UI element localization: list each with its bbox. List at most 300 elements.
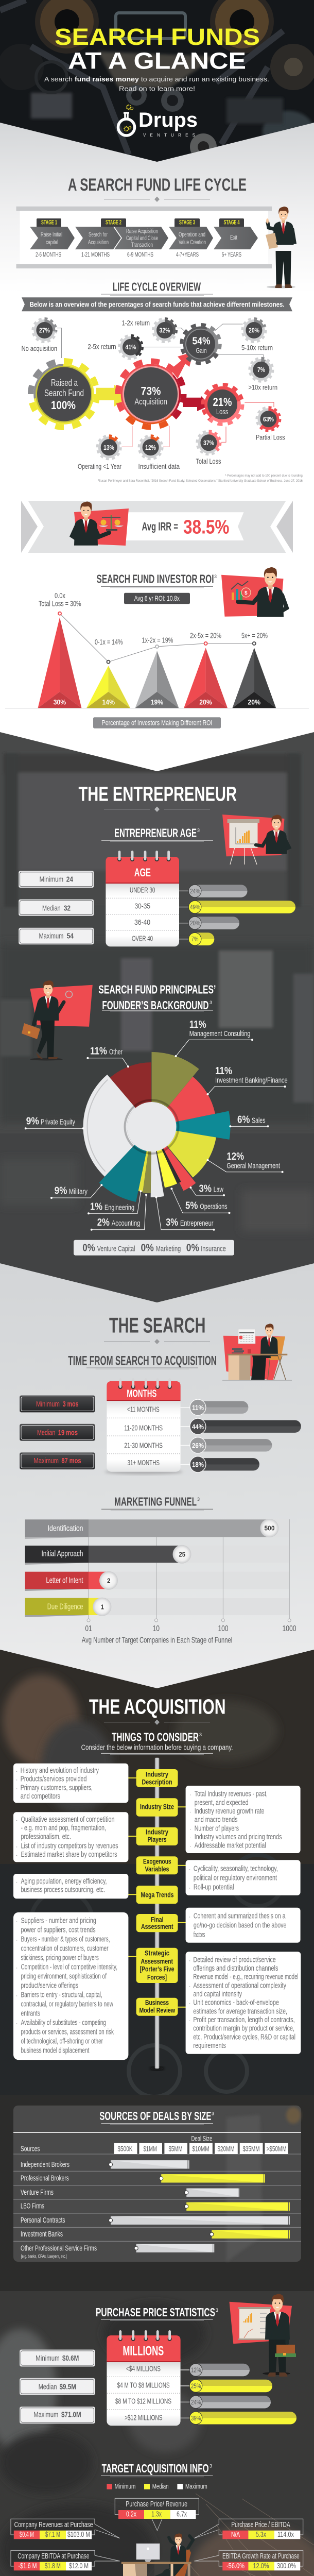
bar: independent brokers <box>109 2160 189 2169</box>
table header: deal sizes <box>114 2143 288 2154</box>
panel: strategic assessment details: · <box>16 2021 18 2026</box>
info box: purchase price / revenue: 0.2x <box>126 2510 136 2518</box>
node: final assessment <box>136 1914 178 1932</box>
panel: industry size details: · <box>189 1809 191 1815</box>
info box: EBITDA growth rate: -56.0% <box>226 2562 245 2570</box>
panel: life cycle stages: 2-6 MONTHS <box>36 252 61 258</box>
table header: deal sizes: >$50MM <box>267 2145 286 2153</box>
stat box: maximum price <box>20 2407 95 2424</box>
pill: chart caption: Percentage of Investors Making Different ROI <box>102 718 212 726</box>
info box: company revenues at purchase <box>11 2519 95 2539</box>
subtitle: A search fund raises money to acquire and run an existing business. <box>44 75 269 83</box>
node: exogenous variables: Exogenous <box>143 1857 171 1865</box>
bar: 39% <box>189 2412 296 2425</box>
gear: >10x return 7%: >10x return <box>248 383 277 392</box>
panel: industry description details: Primary customers, suppliers, <box>21 1784 93 1792</box>
node: business model review: Business <box>145 1999 169 2007</box>
node: final assessment: Final <box>151 1916 164 1924</box>
panel: life cycle stages: Acquisition <box>88 240 109 246</box>
panel: strategic assessment details <box>13 1912 128 2060</box>
callouts: founder background: 5% <box>185 1200 198 1212</box>
bar: initial approach: Initial Approach <box>41 1550 83 1558</box>
panel: industry size details <box>186 1786 301 1853</box>
panel: business model details: Detailed review of product/service <box>193 1956 276 1964</box>
panel: mega trends details: · <box>16 1879 18 1885</box>
calendar: millions <box>107 2330 181 2426</box>
node: industry size: Industry Size <box>140 1803 174 1811</box>
table header: deal sizes: $20MM <box>217 2145 235 2153</box>
bar: 24%: 24% <box>191 2398 201 2406</box>
stat box: minimum 3 mos: Minimum <box>36 1400 60 1409</box>
pyramid: 14% <box>86 666 130 708</box>
heading: search fund investor ROI <box>97 572 217 588</box>
bar: 39%: 39% <box>191 2414 201 2422</box>
panel: sources of deals by size: Sources <box>21 2145 40 2154</box>
panel: strategic assessment details: product/service offerings <box>21 1981 78 1990</box>
node: strategic assessment: [Porter’s Five <box>140 1965 175 1973</box>
gear: 5-10x return 20% <box>240 317 273 351</box>
info box: company EBITDA at purchase: $1.8 M <box>45 2562 61 2570</box>
info box: purchase price / revenue: Purchase Price/ Revenue <box>126 2500 187 2509</box>
node: industry players: Industry <box>146 1828 168 1836</box>
chart: investor ROI pyramids: Total Loss = 30% <box>39 600 81 608</box>
panel: strategic assessment details: · <box>16 1937 18 1943</box>
gear: operating <1 year 13% <box>78 434 123 470</box>
callouts: founder background: 11% <box>189 1019 206 1030</box>
info box: company revenues at purchase: $103.0 M <box>67 2530 90 2539</box>
subheading: entrepreneur age <box>101 826 213 841</box>
bar: 18%: 18% <box>192 1461 204 1469</box>
panel: business model details: requirements <box>193 2042 226 2050</box>
callouts: founder background: Accounting <box>112 1219 140 1228</box>
subheading: target acquisition info: TARGET ACQUISITION INFO <box>102 2462 209 2475</box>
gear: loss: Loss <box>216 408 229 416</box>
subheading: founder's background: FOUNDER’S BACKGROUND <box>102 998 208 1012</box>
panel: life cycle stages: Operation and <box>179 232 205 238</box>
bar: letter of intent <box>25 1571 118 1591</box>
bar: initial approach <box>25 1545 191 1565</box>
figure: man with scale <box>72 501 124 546</box>
pyramid: 30% <box>38 617 81 708</box>
pill: chart caption <box>93 717 221 728</box>
subheading: founder's background: SEARCH FUND PRINCIPALES’ <box>98 982 216 996</box>
gear: raised a search fund: Search Fund <box>44 387 84 398</box>
info box: EBITDA growth rate: 300.0% <box>277 2562 296 2570</box>
panel: industry description details: History and evolution of industry <box>21 1767 99 1775</box>
node: strategic assessment <box>136 1948 178 1983</box>
panel: life cycle stages: STAGE 4 <box>223 219 240 226</box>
subheading: things to consider: THINGS TO CONSIDER <box>112 1730 199 1743</box>
info box: company EBITDA at purchase: -$1.6 M <box>19 2562 37 2570</box>
chart: marketing funnel: Avg Number of Target Companies in Each Stage of Funnel <box>82 1636 232 1645</box>
gear: gain: 54% <box>193 336 211 347</box>
panel: industry players details: · <box>16 1844 18 1850</box>
calendar: age: UNDER 30 <box>130 886 155 894</box>
stat box: minimum 3 mos <box>20 1396 95 1412</box>
panel: final assessment details <box>186 1908 301 1943</box>
bar: identification <box>25 1519 278 1539</box>
gear: total loss 37%: 37% <box>203 439 214 447</box>
panel: life cycle stages: Value Creation <box>179 240 206 246</box>
banner: average IRR: Avg IRR = <box>142 520 178 533</box>
panel: life cycle stages: Search for <box>89 232 108 238</box>
gear: loss: 21% <box>213 395 232 409</box>
chart: investor ROI pyramids: 0.0x <box>55 592 66 600</box>
figure: presenter with chart <box>222 815 289 865</box>
calendar: months: <11 MONTHS <box>127 1405 160 1414</box>
heading: sources of deals by size <box>99 2109 214 2125</box>
panel: exogenous variables details: · <box>189 1886 190 1891</box>
panel: life cycle stages: Exit <box>230 235 238 241</box>
figure: man with board and money case <box>230 2294 296 2377</box>
subheading: things to consider <box>81 1730 233 1755</box>
gear: insufficient data 12%: 12% <box>145 444 156 451</box>
panel: exogenous variables details <box>186 1860 301 1895</box>
panel: strategic assessment details: products or services, assessment on risk <box>21 2027 114 2036</box>
panel: exogenous variables details: political or regulatory environment <box>194 1873 277 1882</box>
info box: EBITDA growth rate <box>219 2550 303 2570</box>
info box: purchase price / EBITDA <box>219 2519 303 2539</box>
stat box: minimum 3 mos: 3 mos <box>63 1400 78 1409</box>
panel: strategic assessment details: contractual, or regulatory barriers to new <box>21 1999 113 2008</box>
node: exogenous variables: Variables <box>145 1865 169 1873</box>
node: strategic assessment: Strategic <box>145 1950 169 1957</box>
callouts: founder background <box>25 1019 288 1231</box>
gear: acquisition: 73% <box>141 385 161 398</box>
footnotes <box>98 474 303 483</box>
panel: industry players details: Estimated market share by competitors <box>21 1851 117 1859</box>
gear: gain: Gain <box>196 346 207 354</box>
panel: strategic assessment details: · <box>16 1965 18 1971</box>
node: strategic assessment: Forces] <box>147 1973 167 1981</box>
section background: the acquisition <box>0 1649 314 2576</box>
section background: the entrepreneur <box>0 732 314 1304</box>
gear: raised a search fund <box>26 357 101 432</box>
node: final assessment: Assessment <box>141 1923 173 1930</box>
info box: purchase price / EBITDA: 5.3x <box>256 2530 266 2539</box>
panel: business model details: · <box>189 2018 190 2024</box>
gear: partial loss 63%: Partial Loss <box>256 433 285 441</box>
subheading: target acquisition info: 3 <box>210 2464 212 2469</box>
calendar: age: AGE <box>134 866 151 879</box>
panel: life cycle stages: Transaction <box>131 242 153 248</box>
panel: industry players details: - e.g. mom and pop, fragmentation, <box>21 1824 106 1833</box>
panel: strategic assessment details: stickiness, pricing power of buyers <box>21 1953 99 1962</box>
panel: business model details: Unit economics - back-of-envelope <box>193 1999 279 2007</box>
chart: marketing funnel: 10 <box>152 1624 160 1633</box>
panel: industry description details: · <box>16 1777 18 1783</box>
panel: zero percent backgrounds: 0% <box>186 1242 199 1253</box>
node: industry description: Description <box>142 1778 172 1786</box>
figure: man with magnifier and briefcase <box>22 980 93 1060</box>
figure: man relaxing at desk <box>116 2533 197 2576</box>
callouts: founder background: General Management <box>226 1162 280 1171</box>
panel: industry players details: Qualitative assessment of competition <box>21 1816 114 1824</box>
bar: due diligence <box>25 1598 111 1617</box>
subheading: founder's background <box>98 982 216 1012</box>
heading: search fund investor ROI: SEARCH FUND INVESTOR ROI <box>97 572 214 586</box>
bar: letter of intent: 2 <box>107 1577 110 1584</box>
panel: business model details: · <box>189 1958 190 1963</box>
logo: Drups Ventures <box>118 105 198 138</box>
table header: deal sizes: $500K <box>117 2145 133 2153</box>
bar: due diligence: Due Diligence <box>47 1602 83 1611</box>
node: strategic assessment: Assessment <box>141 1958 173 1965</box>
heading: the search <box>104 1313 210 1344</box>
callouts: founder background: 9% <box>55 1185 67 1196</box>
info box: purchase price / EBITDA: N/A <box>231 2530 240 2539</box>
stat box: median 32: 32 <box>64 904 71 912</box>
panel: industry size details: · <box>189 1826 191 1832</box>
gear: raised a search fund: 100% <box>51 399 76 412</box>
subheading: purchase price statistics <box>96 2306 218 2320</box>
panel: life cycle stages: STAGE 2 <box>106 219 121 226</box>
gear: 2-5x return 41%: 41% <box>126 343 136 351</box>
pyramid: 19% <box>135 651 179 708</box>
node: mega trends: Mega Trends <box>141 1891 174 1899</box>
connector lines <box>57 324 274 447</box>
bar: initial approach: 25 <box>179 1550 185 1558</box>
bar: 20% <box>188 917 239 929</box>
stat box: median 19 mos: 19 mos <box>58 1429 78 1437</box>
panel: industry players details: List of industry competitors by revenues <box>21 1842 118 1850</box>
stat box: median price: Median <box>39 2383 57 2391</box>
gear: operating <1 year 13%: 13% <box>103 444 114 451</box>
node: business model review: Model Review <box>139 2007 175 2014</box>
bar: 25% <box>189 2380 272 2392</box>
panel: strategic assessment details: Suppliers - number and pricing <box>21 1916 96 1925</box>
panel: strategic assessment details: pricing environment, sophistication of <box>21 1972 107 1980</box>
panel: industry description details: Products/services provided <box>21 1775 87 1784</box>
subheading: things to consider: Consider the below information before buying a company. <box>81 1743 233 1752</box>
callouts: founder background: Law <box>214 1185 223 1194</box>
gear: no acquisition 27% <box>22 317 58 352</box>
panel: business model details: · <box>189 1984 190 1989</box>
panel: industry players details: · <box>16 1818 18 1823</box>
arrow: to gain <box>170 352 194 379</box>
bar: venture firms <box>185 2189 239 2197</box>
gear: 1-2x return 32%: 1-2x return <box>121 319 150 327</box>
gear: 1-2x return 32%: 32% <box>160 327 170 334</box>
panel: business model details <box>186 1952 301 2054</box>
bar: 24% <box>188 885 247 897</box>
node: industry description <box>136 1769 178 1787</box>
heading: the search: THE SEARCH <box>109 1313 206 1337</box>
calendar: millions: $4 M TO $8 MILLIONS <box>117 2381 170 2389</box>
panel: industry size details: and macro trends <box>195 1816 238 1824</box>
subtitle <box>44 75 269 93</box>
callouts: founder background: 9% <box>26 1116 39 1127</box>
info box: company revenues at purchase: $7.1 M <box>45 2530 60 2539</box>
gear: >10x return 7% <box>248 357 277 392</box>
subheading: marketing funnel: MARKETING FUNNEL <box>114 1495 197 1509</box>
panel: mega trends details <box>13 1874 128 1899</box>
calendar: age: OVER 40 <box>132 935 153 943</box>
panel: life cycle stages: Capital and Close <box>126 235 158 242</box>
panel: zero percent backgrounds: Insurance <box>201 1245 226 1253</box>
gear: no acquisition 27%: 27% <box>39 327 50 334</box>
row labels <box>21 2161 97 2259</box>
panel: exogenous variables details: Roll-up potential <box>194 1883 234 1892</box>
stat box: median 32 <box>19 900 94 916</box>
gear: raised a search fund: Raised a <box>51 377 78 388</box>
figure: man at desk with calendar <box>222 1324 292 1381</box>
row labels: Investment Banks <box>21 2230 63 2239</box>
subheading: founder's background: 3 <box>210 1000 212 1005</box>
pyramid: 20% red <box>184 648 228 708</box>
heading: the entrepreneur: THE ENTREPRENEUR <box>78 783 237 805</box>
subheading: purchase price statistics: PURCHASE PRICE STATISTICS <box>96 2306 215 2319</box>
bar: other professional service firms <box>134 2244 214 2252</box>
table header: deal sizes: $1MM <box>143 2145 157 2153</box>
gear: insufficient data 12%: Insufficient data <box>138 462 180 470</box>
panel: life cycle stages: STAGE 3 <box>179 219 195 226</box>
gear: operating <1 year 13%: Operating <1 Year <box>78 462 121 470</box>
panel: strategic assessment details: power of suppliers, cost trends <box>21 1925 96 1934</box>
callouts: founder background: Engineering <box>104 1204 134 1212</box>
callouts: founder background: Other <box>109 1048 123 1057</box>
panel: mega trends details: Aging population, energy efficiency, <box>21 1877 107 1886</box>
chart: marketing funnel: 100 <box>218 1624 229 1633</box>
panel: industry size details: Number of players <box>195 1824 239 1833</box>
panel: strategic assessment details: of technological, off-shoring or other <box>21 2037 103 2045</box>
panel: strategic assessment details: concentration of customers, customer <box>21 1944 109 1953</box>
panel: industry players details <box>13 1812 128 1862</box>
subheading: things to consider: 3 <box>199 1732 202 1737</box>
subheading: marketing funnel: 3 <box>197 1497 200 1502</box>
callouts: founder background: Operations <box>200 1203 228 1211</box>
bars: age distribution <box>179 885 295 945</box>
panel: industry description details: and competitors <box>21 1792 60 1801</box>
bar: 18% <box>190 1456 259 1472</box>
ribbon: overview intro <box>22 297 292 311</box>
chart: investor ROI pyramids: 0-1x = 14% <box>95 638 123 647</box>
calendar: age: 30-35 <box>135 902 150 910</box>
bar: 7% <box>188 933 214 945</box>
stat box: minimum price: $0.6M <box>62 2354 79 2363</box>
panel: life cycle stages: capital <box>46 240 58 246</box>
stat box: median 19 mos <box>20 1424 95 1440</box>
panel: exogenous variables details: Cyclicality, seasonality, technology, <box>194 1865 278 1873</box>
panel: life cycle stages: Raise Initial <box>41 232 62 238</box>
callouts: founder background: Military <box>69 1188 88 1196</box>
arrow: to loss <box>183 396 210 411</box>
calendar: months: 21-30 MONTHS <box>124 1441 163 1450</box>
chart: founder background donut <box>88 1062 216 1191</box>
heading: sources of deals by size: 3 <box>212 2111 214 2116</box>
panel: life cycle stages: 1-21 MONTHS <box>81 252 110 258</box>
gear: 5-10x return 20%: 20% <box>249 327 259 334</box>
title: AT A GLANCE <box>68 47 246 74</box>
chart: investor ROI pyramids: 1x-2x = 19% <box>142 636 173 645</box>
callout pointers <box>95 2519 219 2576</box>
row labels: LBO Firms <box>21 2202 44 2211</box>
table header: deal sizes: $35MM <box>243 2145 259 2153</box>
bar: personal contracts <box>109 2216 290 2225</box>
subheading: entrepreneur age: 3 <box>197 827 200 833</box>
figure: man with chart: $ <box>245 590 248 596</box>
chart: investor ROI pyramids: 2x-5x = 20% <box>190 632 221 640</box>
stat box: minimum 24: 24 <box>66 876 73 884</box>
calendar: millions: >$12 MILLIONS <box>125 2413 163 2422</box>
subheading: purchase price statistics: 3 <box>216 2308 218 2313</box>
panel: industry players details: professionalism, etc. <box>21 1833 71 1841</box>
panel: life cycle stages: 5+ YEARS <box>222 252 241 258</box>
node: exogenous variables <box>136 1856 178 1874</box>
row labels: Other Professional Service Firms <box>21 2244 97 2252</box>
panel: strategic assessment details: Barriers to entry - structural, capital, <box>21 1990 102 1999</box>
figure: man with chart <box>221 567 287 617</box>
subtitle: Read on to learn more! <box>119 84 195 93</box>
bar: due diligence: 1 <box>101 1603 104 1611</box>
panel: zero percent backgrounds: 0% <box>82 1242 95 1253</box>
callouts: founder background: Sales <box>252 1116 266 1125</box>
panel: zero percent backgrounds: 0% <box>141 1242 154 1253</box>
gear: loss <box>200 382 245 427</box>
stat box: median price <box>20 2378 95 2395</box>
panel: life cycle stages: 6-9 MONTHS <box>127 252 153 258</box>
bar: 20%: 20% <box>190 919 200 927</box>
heading: the entrepreneur <box>78 783 237 812</box>
stat box: median 19 mos: Median <box>37 1429 55 1437</box>
callouts: founder background: 12% <box>226 1151 244 1162</box>
panel: life cycle stages <box>16 207 272 268</box>
stat box: median 32: Median <box>42 904 61 912</box>
legend: Maximum <box>185 2483 207 2490</box>
heading: a search fund life cycle: A SEARCH FUND LIFE CYCLE <box>68 175 247 195</box>
row labels: [e.g. banks, CPAs, Lawyers, etc.] <box>21 2253 67 2259</box>
calendar: months <box>104 1378 183 1475</box>
gear: total loss 37%: Total Loss <box>196 457 221 465</box>
title <box>55 24 260 74</box>
panel: sources of deals by size <box>13 2106 301 2262</box>
stat box: minimum 24: Minimum <box>40 876 63 884</box>
legend <box>107 2483 207 2490</box>
info box: company EBITDA at purchase <box>11 2550 95 2570</box>
panel: industry size details: Industry revenue growth rate <box>195 1807 265 1816</box>
gear: 2-5x return 41%: 2-5x return <box>88 343 116 351</box>
chart: marketing funnel: 01 <box>85 1624 92 1633</box>
gear: partial loss 63% <box>255 405 285 441</box>
panel: strategic assessment details: · <box>16 1919 18 1924</box>
callouts: founder background: Management Consulting <box>189 1030 250 1038</box>
node: industry size <box>136 1798 178 1817</box>
panel: industry size details: Industry volumes and pricing trends <box>195 1833 282 1841</box>
stat box: maximum 54: Maximum <box>39 933 63 941</box>
bar: 12%: 12% <box>191 2366 201 2374</box>
heading: a search fund life cycle <box>68 175 247 202</box>
callouts: founder background: 11% <box>215 1065 232 1077</box>
callouts: founder background: 1% <box>90 1201 102 1212</box>
stat box: median price: $9.5M <box>60 2383 76 2391</box>
stat box: minimum price: Minimum <box>36 2354 60 2363</box>
bar: identification: Identification <box>48 1524 83 1533</box>
chevron arrows <box>30 227 258 249</box>
arrow: to acquisition <box>96 385 131 406</box>
panel: industry size details: · <box>189 1792 191 1798</box>
gear: 1-2x return 32% <box>121 317 178 344</box>
info box: purchase price / revenue: 1.3x <box>151 2510 162 2518</box>
panel: strategic assessment details: · <box>16 1993 18 1998</box>
gear: acquisition: Acquisition <box>134 397 167 406</box>
gear: >10x return 7%: 7% <box>257 366 265 374</box>
info box: purchase price / EBITDA: 114.0x <box>277 2530 294 2539</box>
bar: 24%: 24% <box>190 887 200 895</box>
panel: industry description details: · <box>16 1786 18 1791</box>
pyramid: 30%: 30% <box>54 698 66 706</box>
info box: purchase price / revenue: 6.7x <box>177 2510 187 2518</box>
callouts: founder background: 6% <box>237 1114 250 1125</box>
